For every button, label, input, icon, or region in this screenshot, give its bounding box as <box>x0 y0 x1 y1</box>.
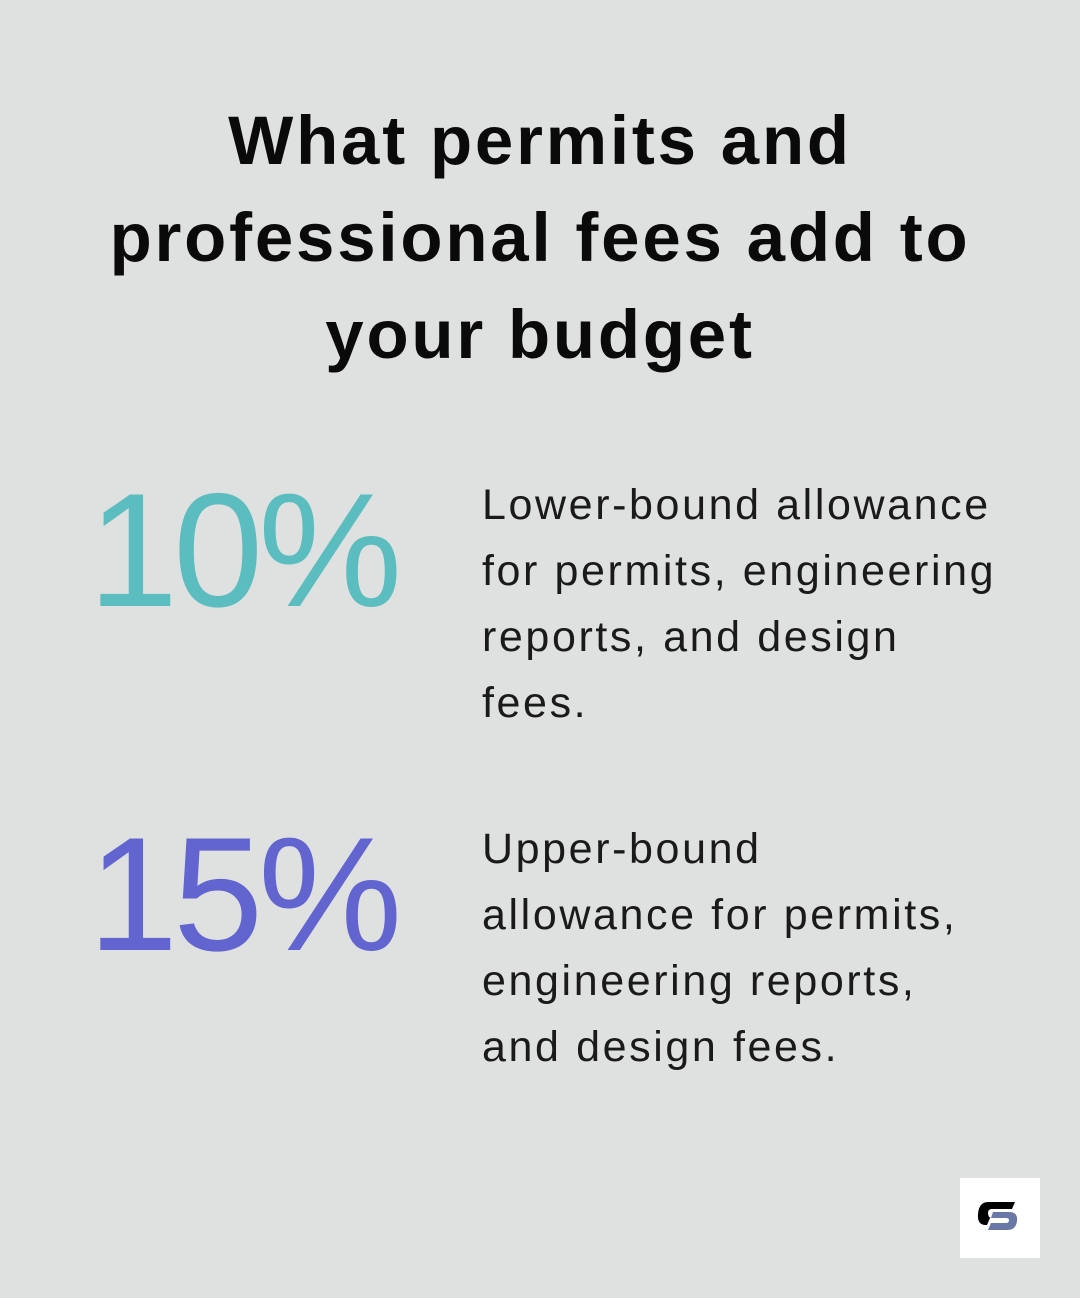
text: lower-bound description: for permits, engineering <box>482 547 996 595</box>
title: professional fees add to <box>110 199 970 276</box>
stat: 15%: 15% <box>88 804 397 985</box>
icon: logo <box>960 1178 1040 1258</box>
text: lower-bound description: fees. <box>482 679 588 727</box>
title: What permits and <box>228 102 852 179</box>
title: your budget <box>325 296 755 373</box>
title <box>110 102 970 373</box>
text: upper-bound description <box>482 825 957 1071</box>
text: lower-bound description <box>482 481 996 727</box>
text: lower-bound description: Lower-bound allowance <box>482 481 991 529</box>
text: lower-bound description: reports, and design <box>482 613 900 661</box>
text: upper-bound description: Upper-bound <box>482 825 762 873</box>
text: upper-bound description: and design fees. <box>482 1023 839 1071</box>
text: upper-bound description: allowance for permits, <box>482 891 957 939</box>
stat: 10%: 10% <box>88 460 397 641</box>
text: upper-bound description: engineering reports, <box>482 957 916 1005</box>
